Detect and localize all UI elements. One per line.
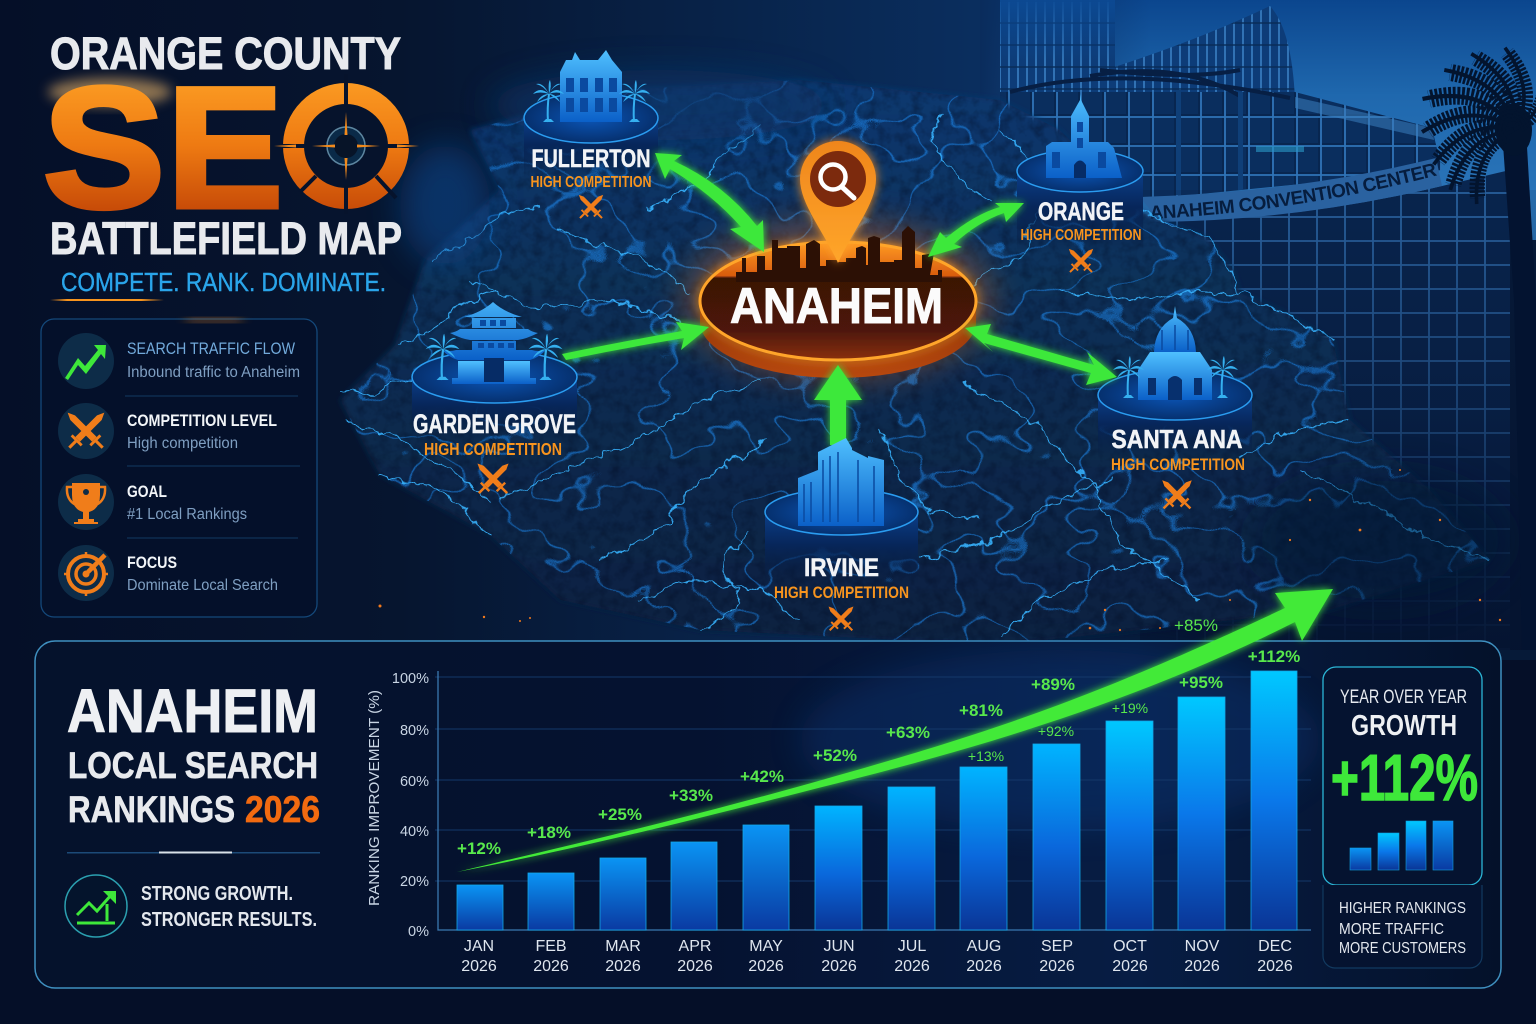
month labels: 2026 xyxy=(461,958,497,975)
icon: swords xyxy=(473,459,513,497)
y axis labels: 40% xyxy=(400,824,429,840)
node: Santa Ana: HIGH COMPETITION xyxy=(1111,455,1245,474)
tagline: COMPETE. RANK. DOMINATE. xyxy=(61,267,386,297)
node: Garden Grove xyxy=(412,290,577,497)
palm tree silhouette xyxy=(1422,46,1536,650)
node: Fullerton xyxy=(524,50,658,221)
title block xyxy=(43,28,419,301)
lower facade xyxy=(1150,170,1510,650)
icon: swords xyxy=(825,603,857,634)
month labels: MAR xyxy=(605,938,641,955)
icon: Orange church xyxy=(1040,94,1122,178)
y axis labels: 0% xyxy=(408,924,429,940)
month labels: DEC xyxy=(1258,938,1292,955)
icon: Fullerton building xyxy=(533,50,650,122)
month labels: 2026 xyxy=(605,958,641,975)
growth percentage labels: +33% xyxy=(669,786,713,805)
y axis labels xyxy=(392,671,429,940)
panel: legend xyxy=(41,318,317,617)
month labels: JAN xyxy=(464,938,494,955)
skyline xyxy=(736,226,942,282)
growth percentage labels: +112% xyxy=(1248,647,1300,666)
legend: competition level: COMPETITION LEVEL xyxy=(127,411,277,430)
growth arrow xyxy=(457,589,1333,872)
title: SEO: E xyxy=(167,52,283,244)
legend: goal: #1 Local Rankings xyxy=(127,506,247,523)
growth percentage labels: +18% xyxy=(527,823,571,842)
legend: search traffic flow: SEARCH TRAFFIC FLOW xyxy=(127,339,295,358)
panel: year over year growth xyxy=(1323,667,1482,885)
upper facade xyxy=(1000,92,1442,230)
month labels: 2026 xyxy=(533,958,569,975)
title: SEO xyxy=(43,49,419,247)
growth percentage labels: +95% xyxy=(1179,673,1223,692)
month labels: 2026 xyxy=(1257,958,1293,975)
growth percentage labels: +25% xyxy=(598,805,642,824)
callout: strong growth xyxy=(65,875,317,937)
title: Battlefield Map: BATTLEFIELD MAP xyxy=(50,213,402,264)
legend: goal: GOAL xyxy=(127,482,167,501)
glass roof xyxy=(1092,6,1295,100)
axis title: RANKING IMPROVEMENT (%) xyxy=(366,690,383,906)
node: Fullerton: FULLERTON xyxy=(532,145,650,173)
callout: strong growth: STRONG GROWTH. xyxy=(141,883,293,905)
arrow: Fullerton to Anaheim xyxy=(655,153,764,252)
node: Orange xyxy=(1017,94,1143,275)
arrow: Irvine to Anaheim xyxy=(814,365,862,445)
node: Orange: HIGH COMPETITION xyxy=(1020,227,1142,244)
hub: Anaheim xyxy=(683,141,993,380)
month labels: MAY xyxy=(749,938,783,955)
legend: focus xyxy=(58,545,278,601)
heading: Anaheim local search rankings: LOCAL SEARCH xyxy=(68,745,318,786)
panel: benefits: MORE TRAFFIC xyxy=(1339,921,1444,938)
bar chart xyxy=(366,650,1320,975)
heading: Anaheim local search rankings xyxy=(67,677,320,830)
heading: Anaheim local search rankings: RANKINGS xyxy=(68,789,235,830)
growth percentage labels: +19% xyxy=(1112,700,1148,716)
node: Irvine xyxy=(765,438,918,634)
icon: swords xyxy=(1066,246,1096,275)
node: Garden Grove: HIGH COMPETITION xyxy=(424,439,562,459)
y axis labels: 60% xyxy=(400,774,429,790)
legend: search traffic flow: Inbound traffic to Anaheim xyxy=(127,364,300,381)
month labels: APR xyxy=(679,938,711,955)
icon: Santa Ana capitol xyxy=(1113,306,1238,400)
month labels: JUL xyxy=(898,938,926,955)
month labels: 2026 xyxy=(1184,958,1220,975)
growth percentage labels: +12% xyxy=(457,839,501,858)
growth percentage labels: +85% xyxy=(1174,616,1218,635)
hub: Anaheim: ANAHEIM xyxy=(730,278,943,334)
icon: pagoda xyxy=(426,290,563,384)
growth percentage labels xyxy=(457,616,1300,858)
mini bar chart xyxy=(1350,821,1453,870)
heading: Anaheim local search rankings: 2026 xyxy=(245,789,320,830)
map land with cracks xyxy=(340,60,1510,650)
panel: rankings xyxy=(35,589,1501,988)
node: Fullerton: HIGH COMPETITION xyxy=(530,174,652,191)
month labels: AUG xyxy=(967,938,1001,955)
month labels: FEB xyxy=(535,938,567,955)
bars xyxy=(457,671,1297,930)
icon: location pin xyxy=(800,141,876,263)
month labels: 2026 xyxy=(748,958,784,975)
embers xyxy=(378,469,1501,631)
growth percentage labels: +42% xyxy=(740,767,784,786)
month labels: 2026 xyxy=(1112,958,1148,975)
node: Orange: ORANGE xyxy=(1038,198,1124,226)
panel: benefits: MORE CUSTOMERS xyxy=(1339,940,1466,957)
growth percentage labels: +13% xyxy=(968,748,1004,764)
y axis labels: 20% xyxy=(400,874,429,890)
traffic arrows xyxy=(562,153,1117,445)
growth percentage labels: +92% xyxy=(1038,723,1074,739)
month labels: 2026 xyxy=(894,958,930,975)
month labels: NOV xyxy=(1185,938,1220,955)
legend: focus: Dominate Local Search xyxy=(127,577,278,594)
month labels xyxy=(461,938,1293,975)
icon: swords xyxy=(1158,476,1196,512)
legend: focus: FOCUS xyxy=(127,553,177,572)
arrow: Santa Ana to Anaheim xyxy=(965,324,1117,385)
panel: year over year growth: GROWTH xyxy=(1351,710,1457,742)
growth percentage labels: +89% xyxy=(1031,675,1075,694)
month labels: JUN xyxy=(823,938,855,955)
convention center sign: ANAHEIM CONVENTION CENTER xyxy=(1150,164,1437,219)
arrow: Orange to Anaheim xyxy=(928,203,1024,257)
growth percentage labels: +52% xyxy=(813,746,857,765)
title: SEO: S xyxy=(43,52,165,244)
month labels: 2026 xyxy=(1039,958,1075,975)
panel: year over year growth: +112% xyxy=(1331,741,1478,814)
legend: search traffic flow xyxy=(58,333,300,389)
node: Santa Ana xyxy=(1098,306,1252,512)
tower xyxy=(1000,0,1115,100)
y axis labels: 100% xyxy=(392,671,429,687)
month labels: 2026 xyxy=(677,958,713,975)
month labels: OCT xyxy=(1113,938,1147,955)
panel: benefits: HIGHER RANKINGS xyxy=(1339,900,1466,917)
month labels: 2026 xyxy=(821,958,857,975)
y axis labels: 80% xyxy=(400,723,429,739)
convention center building xyxy=(1000,0,1536,650)
arrow: Garden Grove to Anaheim xyxy=(562,322,709,360)
callout: strong growth: STRONGER RESULTS. xyxy=(141,909,317,931)
growth percentage labels: +81% xyxy=(959,701,1003,720)
month labels: SEP xyxy=(1041,938,1073,955)
icon: Irvine towers xyxy=(798,438,884,526)
legend: competition level: High competition xyxy=(127,435,238,452)
title: Orange County: ORANGE COUNTY xyxy=(50,28,401,79)
heading: Anaheim local search rankings: ANAHEIM xyxy=(67,677,318,745)
legend: competition level xyxy=(58,403,277,459)
growth percentage labels: +63% xyxy=(886,723,930,742)
node: Santa Ana: SANTA ANA xyxy=(1112,424,1243,454)
icon: swords xyxy=(576,192,606,221)
node: Garden Grove: GARDEN GROVE xyxy=(413,409,576,439)
node: Irvine: HIGH COMPETITION xyxy=(774,583,909,602)
node: Irvine: IRVINE xyxy=(804,554,879,582)
panel: year over year growth: YEAR OVER YEAR xyxy=(1340,687,1467,708)
panel: benefits xyxy=(1323,885,1482,968)
legend: goal xyxy=(58,474,247,530)
month labels: 2026 xyxy=(966,958,1002,975)
